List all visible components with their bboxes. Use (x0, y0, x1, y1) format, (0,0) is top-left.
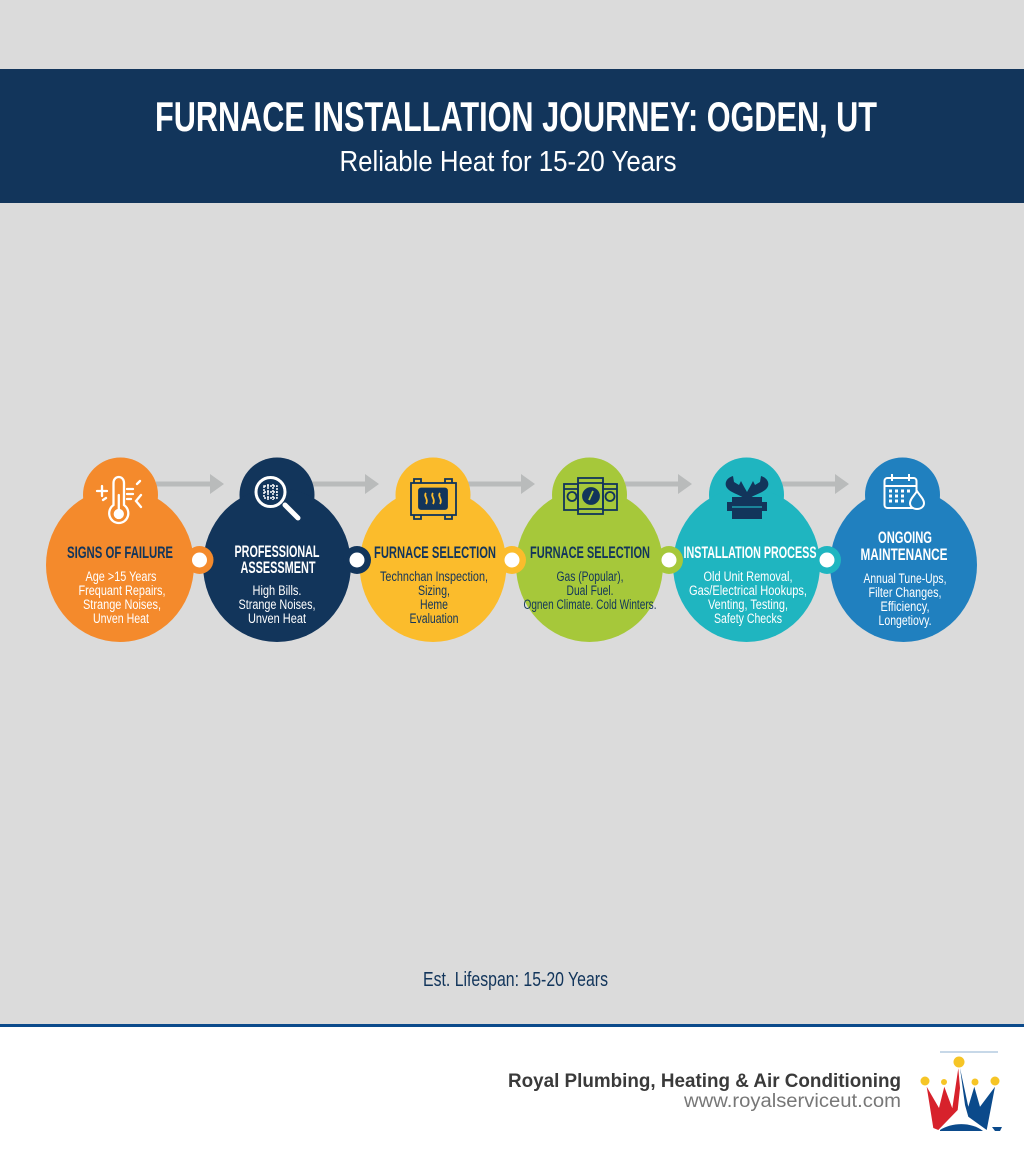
step heading: PROFESSIONAL (234, 543, 320, 561)
arrows between steps (156, 474, 849, 494)
step details: High Bills. (252, 583, 302, 598)
step heading (234, 543, 320, 577)
step details: Old Unit Removal, (704, 569, 792, 584)
icon: thermometer (97, 477, 141, 523)
step details: Ognen Climate. Cold Winters. (524, 597, 656, 612)
step 3: furnace selection, inspection (360, 458, 526, 642)
icon: magnifying glass (256, 478, 298, 518)
step heading: ONGOING (878, 529, 932, 547)
step details: Strange Noises, (238, 597, 316, 612)
step details: Venting, Testing, (708, 597, 788, 612)
step details: Heme (420, 597, 448, 612)
step details: Unven Heat (248, 611, 306, 626)
step details: Gas (Popular), (556, 569, 624, 584)
step heading: FURNACE SELECTION (374, 544, 496, 562)
step heading: ASSESSMENT (240, 559, 316, 577)
website: www.royalserviceut.com (683, 1091, 901, 1112)
step details: Gas/Electrical Hookups, (689, 583, 807, 598)
step 1: signs of failure (46, 458, 214, 642)
step details: Unven Heat (93, 611, 149, 626)
footer (0, 1024, 1024, 1154)
step details (380, 569, 488, 626)
step details: Age >15 Years (86, 569, 157, 584)
step details (238, 583, 316, 626)
step details: Annual Tune-Ups, (864, 571, 946, 586)
icon: furnace (411, 479, 456, 519)
company name: Royal Plumbing, Heating & Air Conditioning (508, 1071, 901, 1092)
step details: Evaluation (410, 611, 458, 626)
step details (864, 571, 946, 628)
step heading: FURNACE SELECTION (530, 544, 650, 562)
step details (689, 569, 807, 626)
step details: Frequant Repairs, (78, 583, 166, 598)
icon: furnace units (564, 478, 617, 514)
step details: Efficiency, (880, 599, 930, 614)
step 5: installation process (673, 458, 841, 642)
lifespan note: Est. Lifespan: 15-20 Years (423, 969, 608, 991)
header banner (0, 69, 1024, 203)
step 6: ongoing maintenance (830, 458, 977, 642)
step details: Sizing, (418, 583, 450, 598)
step heading (860, 529, 948, 564)
step heading: SIGNS OF FAILURE (67, 544, 173, 562)
step details: Longetiovy. (878, 613, 932, 628)
icon: calendar and drop (884, 474, 924, 509)
logo: crown (920, 1052, 1002, 1131)
step details (78, 569, 166, 626)
subtitle: Reliable Heat for 15-20 Years (340, 146, 676, 178)
step details (524, 569, 656, 612)
icon: tools and toolbox (726, 476, 768, 519)
step 2: professional assessment (203, 458, 371, 642)
step heading: MAINTENANCE (860, 546, 948, 564)
step 4: furnace selection, fuel types (516, 458, 683, 642)
step details: Dual Fuel. (566, 583, 614, 598)
step details: Safety Checks (714, 611, 782, 626)
step details: Technchan Inspection, (380, 569, 488, 584)
step details: Strange Noises, (83, 597, 161, 612)
step heading: INSTALLATION PROCESS (684, 544, 816, 562)
step details: Filter Changes, (868, 585, 942, 600)
